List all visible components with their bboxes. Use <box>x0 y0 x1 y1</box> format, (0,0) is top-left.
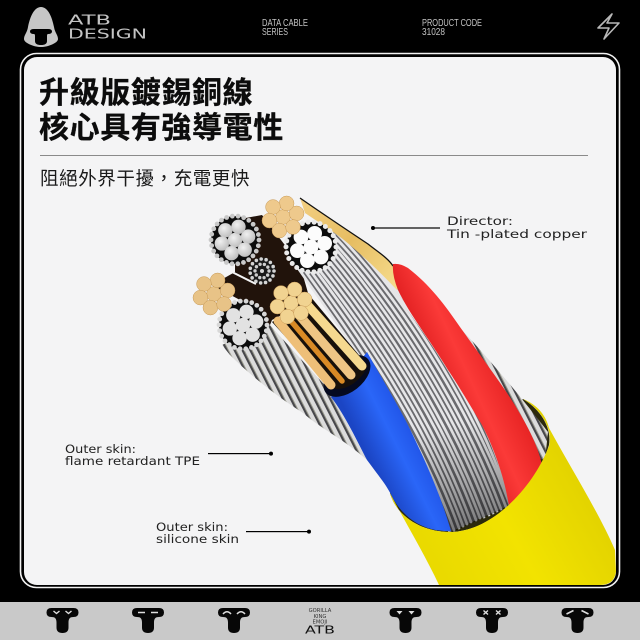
gold cross-section: top <box>262 196 304 238</box>
footer brand: ATB <box>305 624 335 636</box>
series text: SERIES <box>262 27 288 38</box>
back silver strand <box>462 330 548 460</box>
icon: face 2 <box>132 608 164 633</box>
lower silver strand <box>222 323 367 460</box>
footer strip <box>0 602 640 640</box>
callout: flame retardant TPE <box>65 442 273 468</box>
main panel <box>24 57 616 585</box>
panel frame <box>20 54 620 588</box>
blue wire <box>316 347 451 531</box>
footer brand: KING <box>314 614 326 620</box>
product code text: 31028 <box>422 27 445 38</box>
callout: flame retardant TPE: flame retardant TPE <box>65 454 200 468</box>
callout: silicone skin: silicone skin <box>156 532 239 546</box>
cable illustration <box>193 196 616 585</box>
heading: 升級版鍍錫銅線 <box>39 77 253 110</box>
series text: DATA CABLE <box>262 18 308 29</box>
footer brand <box>305 608 335 636</box>
icon: face 5 <box>476 608 508 633</box>
callout: director <box>371 214 587 241</box>
product code text: PRODUCT CODE <box>422 18 482 29</box>
gold cross-section: right <box>270 282 312 324</box>
wire cross-section: bottom left <box>219 301 267 349</box>
brand name: ATB <box>68 14 111 28</box>
dark core behind strands <box>218 215 308 326</box>
wire cross-section: top left <box>211 216 259 264</box>
footer brand: EMOJI <box>313 620 328 626</box>
wire cross-section: top right <box>286 222 336 272</box>
callout: silicone skin: Outer skin: <box>156 520 228 534</box>
divider <box>40 155 588 156</box>
callout: director: Tin -plated copper <box>446 227 587 241</box>
heading: 核心具有強導電性 <box>39 112 284 145</box>
icon: lightning bolt <box>598 14 619 39</box>
heading <box>39 77 284 145</box>
brand name <box>68 14 147 42</box>
subheading: 阻絕外界干擾，充電更快 <box>40 168 250 189</box>
brand name: DESIGN <box>68 26 147 42</box>
red wire <box>393 264 542 506</box>
wire cross-section: small centre <box>248 258 276 284</box>
jacket inner lining <box>390 399 549 532</box>
icon: face 6 <box>562 608 594 633</box>
icon: face 4 <box>390 608 422 633</box>
callout: director: Director: <box>447 214 513 228</box>
icon: face 1 <box>46 608 78 633</box>
icon: face 3 <box>218 608 250 633</box>
logo: ATB helmet <box>24 7 58 47</box>
product code text <box>422 18 482 38</box>
series text <box>262 18 308 38</box>
callout: silicone skin <box>156 520 311 546</box>
main silver strand <box>298 228 512 533</box>
gold cross-section: left <box>193 273 235 315</box>
gold bundle <box>272 296 368 389</box>
footer brand: GORILLA <box>309 608 332 614</box>
yellow outer jacket <box>390 399 616 585</box>
callout: flame retardant TPE: Outer skin: <box>65 442 136 456</box>
gold strand, outer edge <box>300 198 400 290</box>
